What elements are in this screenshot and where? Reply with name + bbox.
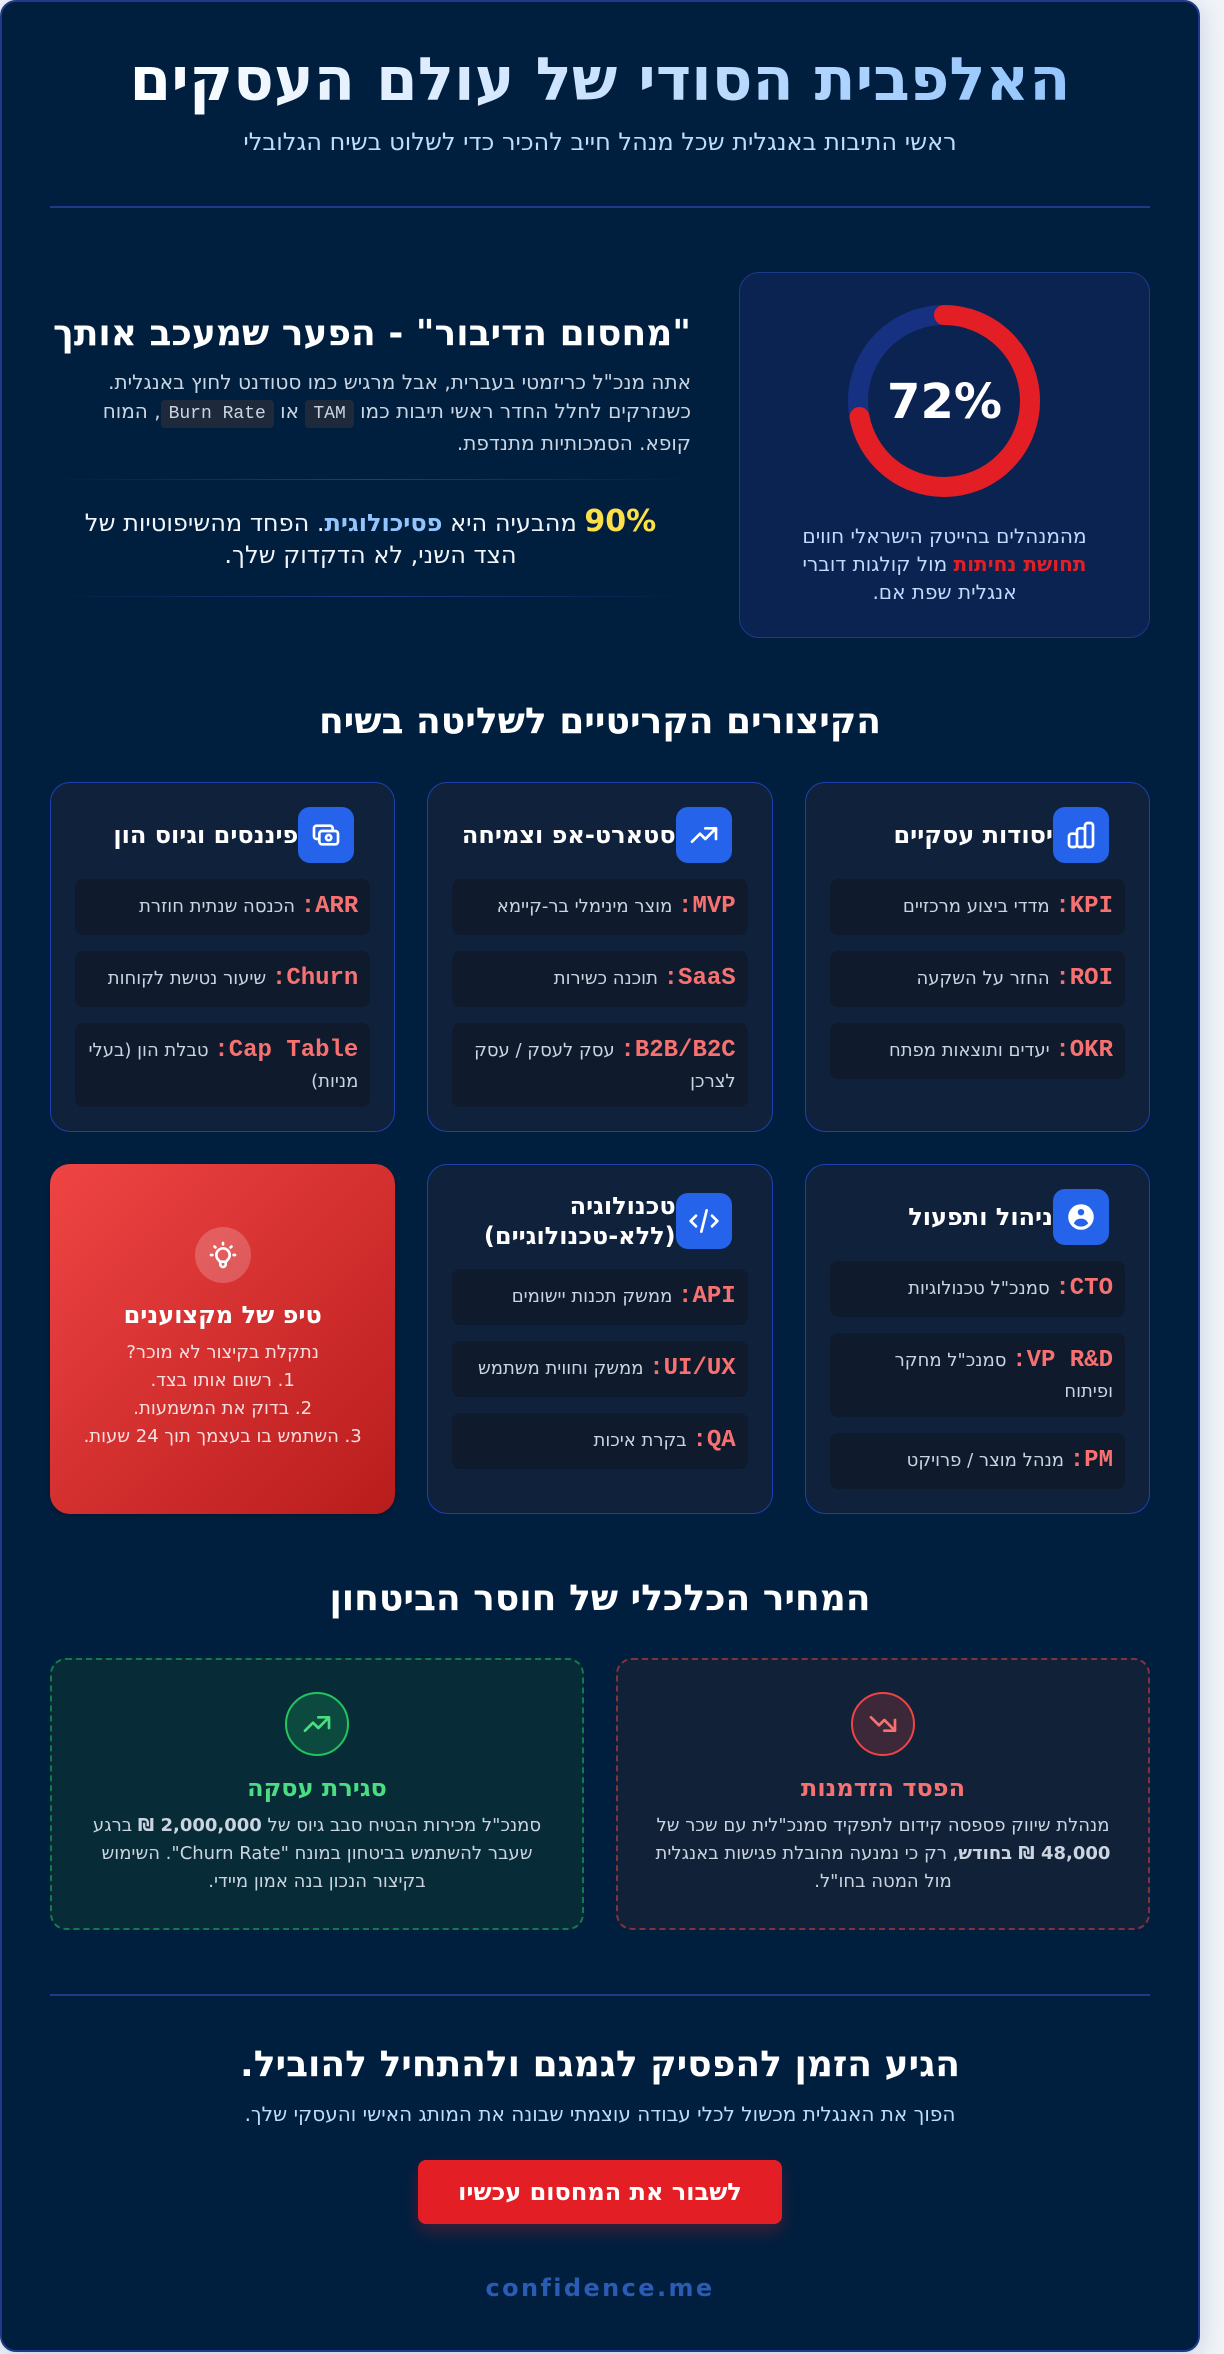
CTA button: לשבור את המחסום עכשיו bbox=[458, 2178, 742, 2206]
panel: pro tip bbox=[50, 1164, 395, 1514]
OKR: OKR: יעדים ותוצאות מפתח bbox=[889, 1037, 1113, 1064]
stat caption bbox=[802, 524, 1087, 604]
MVP: MVP: מוצר מינימלי בר-קיימא bbox=[497, 893, 736, 920]
Churn: Churn: שיעור נטישת לקוחות bbox=[108, 965, 358, 992]
API: API: ממשק תכנות יישומים bbox=[512, 1283, 736, 1310]
ARR: ARR: הכנסה שנתית חוזרת bbox=[139, 893, 358, 920]
icon: trending up bbox=[285, 1692, 349, 1756]
QA: QA: בקרת איכות bbox=[594, 1427, 736, 1454]
quote: הצד השני, לא הדקדוק שלך. bbox=[224, 541, 517, 569]
paragraph: אתה מנכ"ל כריזמטי בעברית, אבל מרגיש כמו סטודנט לחוץ באנגלית. bbox=[108, 370, 691, 394]
donut chart 72%: 72% bbox=[887, 374, 1002, 430]
section heading: cost: המחיר הכלכלי של חוסר הביטחון bbox=[329, 1578, 871, 1619]
card title: (ללא-טכנולוגיים) bbox=[484, 1222, 676, 1250]
paragraph bbox=[103, 370, 691, 455]
text: 48,000 ₪ בחודש, רק כי נמנעה מהובלת פגישות באנגלית bbox=[656, 1843, 1110, 1864]
UI/UX: UI/UX: ממשק וחווית משתמש bbox=[478, 1355, 736, 1382]
CTA subtext: הפוך את האנגלית מכשול לכלי עבודה עוצמתי שבונה את המותג האישי והעסקי שלך. bbox=[245, 2102, 955, 2126]
stat caption: אנגלית שפת אם. bbox=[872, 580, 1017, 604]
VP R&D: ופיתוח bbox=[1064, 1381, 1113, 1402]
SaaS bbox=[452, 951, 748, 1007]
text bbox=[93, 1815, 541, 1892]
CTA button bbox=[418, 2160, 782, 2224]
QA bbox=[452, 1413, 748, 1469]
text: שעבר להשתמש בביטחון במונח "Churn Rate". השימוש bbox=[102, 1843, 532, 1864]
title: הפסד הזדמנות bbox=[801, 1774, 965, 1802]
OKR bbox=[830, 1023, 1125, 1079]
icon: bar chart bbox=[1053, 807, 1109, 863]
website: confidence.me bbox=[485, 2274, 715, 2302]
quote: 90% מהבעיה היא פסיכולוגית. הפחד מהשיפוטיות של bbox=[85, 504, 656, 539]
CTO bbox=[830, 1261, 1125, 1317]
paragraph: כשנזרקים לחלל החדר ראשי תיבות כמו TAM או Burn Rate, המוח bbox=[103, 399, 691, 424]
call to action bbox=[240, 2044, 960, 2302]
KPI bbox=[830, 879, 1125, 935]
title: האלפבית הסודי של עולם העסקים bbox=[129, 45, 1070, 115]
subtitle: ראשי התיבות באנגלית שכל מנהל חייב להכיר כדי לשלוט בשיח הגלובלי bbox=[243, 128, 957, 156]
card title: יסודות עסקיים bbox=[893, 821, 1053, 849]
tip title: טיפ של מקצוענים bbox=[124, 1301, 322, 1329]
panel: startup and growth bbox=[427, 782, 773, 1132]
section heading: acronyms: הקיצורים הקריטיים לשליטה בשיח bbox=[319, 701, 881, 742]
text: סמנכ"ל מכירות הבטיח סבב גיוס של 2,000,000 ₪ ברגע bbox=[93, 1815, 541, 1836]
donut chart 72% bbox=[848, 305, 1040, 497]
card title: פיננסים וגיוס הון bbox=[113, 821, 298, 849]
tip text: נתקלת בקיצור לא מוכר? bbox=[126, 1342, 319, 1363]
VP R&D: VP R&D: סמנכ"ל מחקר bbox=[895, 1347, 1113, 1374]
card title: סטארט-אפ וצמיחה bbox=[462, 821, 676, 849]
panel: missed opportunity bbox=[616, 1658, 1150, 1930]
title: סגירת עסקה bbox=[247, 1774, 387, 1802]
ARR bbox=[75, 879, 370, 935]
tip text: 1. רשום אותו בצד. bbox=[150, 1370, 295, 1391]
ROI: ROI: החזר על השקעה bbox=[916, 965, 1113, 992]
panel: 72% statistic bbox=[739, 272, 1150, 638]
panel: speaking barrier text bbox=[53, 313, 691, 597]
MVP bbox=[452, 879, 748, 935]
B2B/B2C: לצרכן bbox=[690, 1071, 736, 1092]
panel: closed deal bbox=[50, 1658, 584, 1930]
icon: trending down bbox=[851, 1692, 915, 1756]
text: מול המטה בחו"ל. bbox=[814, 1871, 952, 1892]
text: מנהלת שיווק פספסה קידום לתפקיד סמנכ"לית עם שכר של bbox=[656, 1815, 1110, 1836]
tip text: 2. בדוק את המשמעות. bbox=[133, 1398, 312, 1419]
ROI bbox=[830, 951, 1125, 1007]
tip text bbox=[84, 1342, 362, 1447]
panel: technology bbox=[427, 1164, 773, 1514]
paragraph: קופא. הסמכותיות מתנדפת. bbox=[457, 431, 691, 455]
SaaS: SaaS: תוכנה כשירות bbox=[554, 965, 736, 992]
header bbox=[129, 45, 1070, 156]
Cap Table: Cap Table: טבלת הון (בעלי bbox=[88, 1037, 358, 1064]
PM bbox=[830, 1433, 1125, 1489]
icon: code bbox=[676, 1193, 732, 1249]
tip text: 3. השתמש בו בעצמך תוך 24 שעות. bbox=[84, 1426, 362, 1447]
panel: business fundamentals bbox=[805, 782, 1150, 1132]
panel: finance and fundraising bbox=[50, 782, 395, 1132]
B2B/B2C: B2B/B2C: עסק לעסק / עסק bbox=[474, 1037, 736, 1064]
text: בקיצור הנכון בנה אמון מיידי. bbox=[208, 1871, 426, 1892]
icon: trending up bbox=[676, 807, 732, 863]
Cap Table bbox=[75, 1023, 370, 1107]
text bbox=[656, 1815, 1110, 1892]
Churn bbox=[75, 951, 370, 1007]
PM: PM: מנהל מוצר / פרויקט bbox=[907, 1447, 1113, 1474]
API bbox=[452, 1269, 748, 1325]
VP R&D bbox=[830, 1333, 1125, 1417]
icon: cash bbox=[298, 807, 354, 863]
CTO: CTO: סמנכ"ל טכנולוגיות bbox=[908, 1275, 1113, 1302]
B2B/B2C bbox=[452, 1023, 748, 1107]
card title bbox=[484, 1192, 676, 1250]
panel: management and operations bbox=[805, 1164, 1150, 1514]
card title: טכנולוגיה bbox=[570, 1192, 676, 1220]
heading: "מחסום הדיבור" - הפער שמעכב אותך bbox=[53, 313, 691, 354]
KPI: KPI: מדדי ביצוע מרכזיים bbox=[903, 893, 1113, 920]
icon: user circle bbox=[1053, 1189, 1109, 1245]
stat caption: תחושת נחיתות מול קולגות דוברי bbox=[803, 552, 1086, 576]
CTA heading: הגיע הזמן להפסיק לגמגם ולהתחיל להוביל. bbox=[240, 2044, 960, 2085]
card title: ניהול ותפעול bbox=[908, 1203, 1053, 1231]
UI/UX bbox=[452, 1341, 748, 1397]
stat caption: מהמנהלים בהייטק הישראלי חווים bbox=[802, 524, 1087, 548]
Cap Table: מניות) bbox=[311, 1071, 358, 1092]
icon: lightbulb bbox=[194, 1227, 250, 1283]
quote bbox=[85, 479, 656, 597]
